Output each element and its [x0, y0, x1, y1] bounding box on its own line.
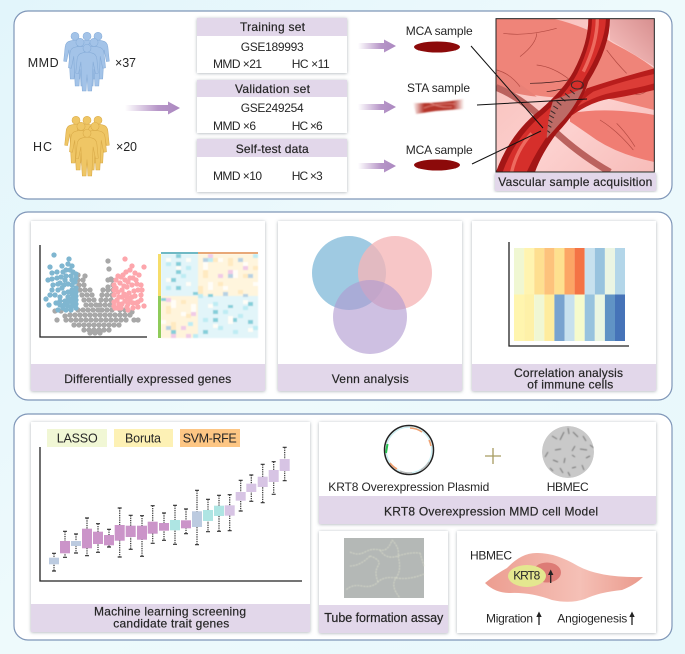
- legend: Boruta: Boruta: [125, 432, 161, 446]
- card: validation set: Validation set: [235, 82, 311, 96]
- card: machine learning screening: [31, 422, 310, 632]
- pointer lines: [471, 46, 587, 164]
- MMD label: MMD: [28, 56, 59, 70]
- HBMEC label: HBMEC: [547, 480, 589, 494]
- gene expression heatmap: [158, 252, 258, 338]
- caption: vascular sample acquisition: Vascular sample acquisition: [498, 175, 652, 189]
- card: self-test data: Self-test data: [236, 142, 309, 156]
- card: self-test data: [197, 139, 347, 192]
- caption: [472, 364, 656, 392]
- card: KRT8 overexpression model: [319, 422, 656, 524]
- HBMEC label: HBMEC: [470, 548, 512, 562]
- MCA sample label top: MCA sample: [406, 24, 473, 38]
- plasmid label: KRT8 Overexpression Plasmid: [328, 480, 489, 494]
- card: differentially expressed genes: [31, 221, 265, 391]
- panel: sample cohort and datasets: [14, 11, 672, 199]
- legend: SVM-RFE: SVM-RFE: [183, 432, 237, 446]
- STA sample label: STA sample: [407, 81, 470, 95]
- panel: bioinformatics analysis: [14, 212, 672, 400]
- icon: plasmid: [384, 426, 434, 474]
- card: self-test data: MMD ×10: [213, 169, 262, 183]
- arrow: angiogenesis up: [629, 612, 635, 625]
- HC count: ×20: [116, 140, 137, 154]
- card: self-test data: HC ×3: [292, 169, 323, 183]
- caption: Differentially expressed genes: [64, 372, 231, 386]
- HC label: HC: [33, 140, 52, 154]
- volcano plot: [40, 245, 147, 337]
- caption: Machine learning screening: [94, 605, 246, 619]
- caption: candidate trait genes: [113, 616, 229, 630]
- card: training set: Training set: [240, 20, 306, 34]
- card: training set: HC ×11: [292, 57, 330, 71]
- card: training set: [197, 18, 347, 73]
- icon: MMD patient group: [64, 32, 109, 91]
- icon: STA sample: [413, 99, 464, 114]
- caption: [31, 364, 265, 391]
- legend: LASSO: [47, 429, 107, 447]
- icon: MCA sample bottom: [414, 160, 460, 170]
- caption: Venn analysis: [332, 372, 409, 386]
- card: immune cell correlation: [472, 221, 656, 392]
- arrow: training to MCA sample: [358, 40, 396, 52]
- panel: machine learning and validation: [14, 414, 672, 640]
- card: training set: MMD ×21: [213, 57, 262, 71]
- correlation heatmap: [509, 242, 629, 346]
- caption: KRT8 Overexpression MMD cell Model: [384, 505, 598, 519]
- Migration label: Migration: [486, 611, 533, 625]
- caption: Correlation analysis: [514, 366, 623, 380]
- card: validation set: GSE249254: [241, 101, 304, 115]
- caption: Tube formation assay: [324, 611, 444, 625]
- icon: healthy control group: [65, 116, 109, 176]
- caption: [319, 496, 656, 524]
- caption: of immune cells: [527, 378, 613, 392]
- card: training set: GSE189993: [241, 40, 304, 54]
- card: validation set: [197, 80, 347, 133]
- MMD count: ×37: [115, 56, 136, 70]
- arrow: validation to STA sample: [358, 100, 396, 114]
- MCA sample label bottom: MCA sample: [406, 143, 473, 157]
- icon: HBMEC culture: [542, 426, 594, 478]
- card: validation set: HC ×6: [292, 119, 323, 133]
- caption: [278, 364, 462, 391]
- micrograph: [344, 538, 424, 598]
- illustration: endothelial cell: [485, 553, 643, 602]
- icon: MCA sample top: [414, 42, 460, 52]
- illustration: endothelial cell: KRT8: [513, 568, 541, 582]
- arrow: self-test to MCA sample: [358, 160, 396, 172]
- card: Venn analysis: [278, 221, 462, 391]
- legend: LASSO: LASSO: [57, 432, 98, 446]
- arrow: cohort to datasets: [125, 102, 180, 114]
- illustration: vascular bypass: [496, 19, 654, 172]
- arrow: migration up: [536, 612, 542, 625]
- legend: Boruta: [114, 429, 173, 447]
- Venn diagram: [312, 236, 432, 354]
- caption: [31, 604, 310, 632]
- box plot: [40, 447, 302, 581]
- card: tube formation assay: [319, 531, 448, 633]
- Angiogenesis label: Angiogenesis: [557, 611, 627, 625]
- card: HBMEC effects: [457, 531, 656, 633]
- card: validation set: MMD ×6: [213, 119, 256, 133]
- icon: plus: [485, 448, 501, 464]
